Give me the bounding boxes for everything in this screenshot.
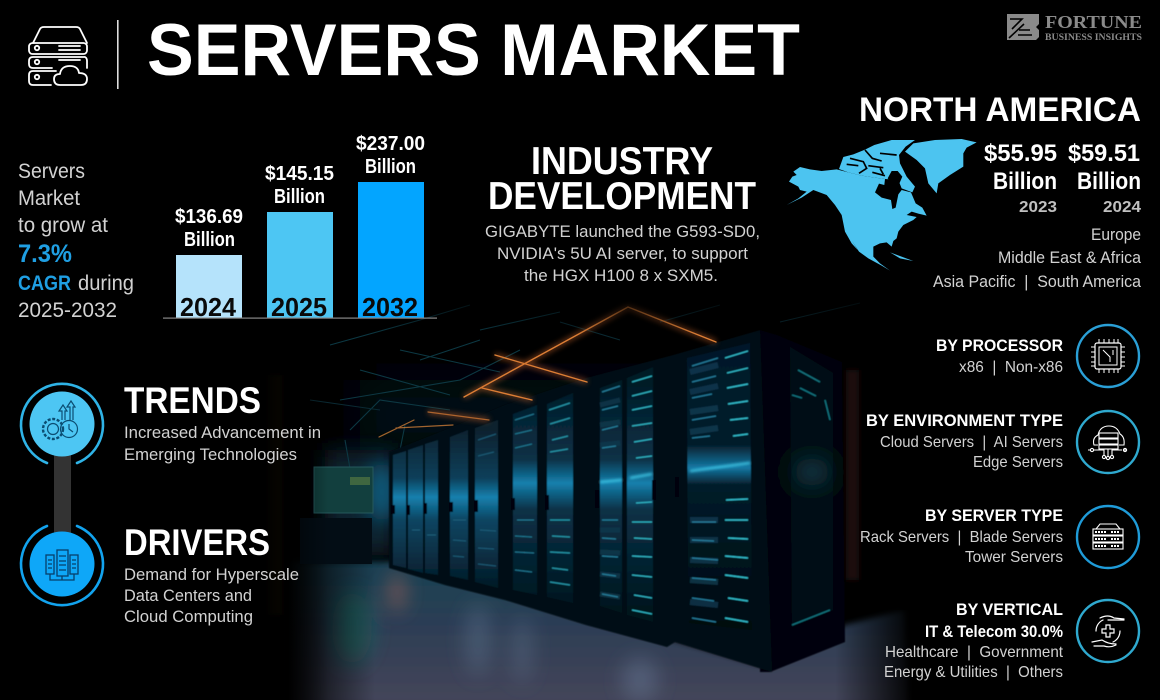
- icon: drivers circle: [21, 526, 103, 605]
- icon: processor chip: [1077, 325, 1139, 387]
- industry development text: NVIDIA's 5U AI server, to support: [497, 244, 748, 263]
- north america values: Billion: [993, 168, 1057, 195]
- industry development text: the HGX H100 8 x SXM5.: [524, 266, 718, 285]
- drivers text: Cloud Computing: [124, 608, 253, 626]
- north america values: $59.51: [1068, 140, 1140, 167]
- connector: [54, 455, 71, 535]
- segment: by processor: x86 | Non-x86: [959, 359, 1063, 376]
- room wall and ceiling tint: [360, 380, 780, 450]
- arctic archipelago: [839, 140, 915, 192]
- rack group: [389, 330, 845, 672]
- growth text block: to grow at: [18, 214, 108, 237]
- bar 2025: $145.15: [265, 163, 334, 185]
- side glass: [790, 347, 833, 627]
- bar 2032: [356, 133, 425, 322]
- dim orange columns: [846, 370, 859, 580]
- drivers text: Demand for Hyperscale: [124, 566, 299, 584]
- bar 2025: 2025: [271, 292, 327, 322]
- drivers text: [124, 522, 299, 626]
- segment: by processor: BY PROCESSOR: [936, 336, 1063, 355]
- segment: by server type: [860, 506, 1139, 568]
- archipelago channels: [847, 150, 897, 176]
- header divider: [117, 20, 119, 89]
- floor reflections: [332, 572, 658, 700]
- bar 2024: [175, 206, 243, 322]
- other regions: [933, 225, 1142, 291]
- title: SERVERS MARKET: [147, 10, 800, 91]
- industry development text: GIGABYTE launched the G593-SD0,: [485, 222, 760, 241]
- orange ceiling lights: [379, 307, 716, 437]
- logo: Fortune Business Insights: FORTUNE: [1045, 12, 1142, 32]
- bright glow streaks: [600, 463, 750, 482]
- segment: by processor: [936, 325, 1139, 387]
- segment: by server type: Rack Servers | Blade Servers: [860, 529, 1063, 546]
- side glass glow: [794, 458, 830, 486]
- server unit rows: [690, 365, 718, 605]
- north america values: $55.95: [984, 140, 1057, 167]
- segment: by environment type: Cloud Servers | AI Servers: [880, 434, 1063, 451]
- greenland: [905, 139, 977, 193]
- floor: [290, 562, 910, 700]
- icon: server stack: [1077, 506, 1139, 568]
- foxe basin: [888, 171, 902, 184]
- segment: by environment type: [866, 411, 1139, 473]
- header icon: server with cloud: [29, 27, 87, 85]
- rack side panel: [760, 330, 845, 672]
- north america heading: NORTH AMERICA: [859, 91, 1141, 129]
- bar 2032: Billion: [365, 156, 416, 178]
- segment: by vertical: Energy & Utilities | Others: [884, 664, 1063, 681]
- bar chart: [163, 133, 437, 322]
- growth text block: [18, 160, 134, 322]
- segment: by vertical: [884, 600, 1139, 681]
- icon: hands with medical cross: [1077, 600, 1139, 662]
- industry development heading: DEVELOPMENT: [488, 175, 756, 218]
- drivers text: Data Centers and: [124, 587, 252, 605]
- mainland: [787, 167, 927, 271]
- growth text block: 2025-2032: [18, 299, 117, 322]
- bar 2025: [265, 163, 334, 322]
- icon: cloud server: [1077, 411, 1139, 473]
- led strips: [725, 351, 748, 622]
- trends text: [124, 380, 321, 464]
- teal ceiling lines: [330, 305, 560, 480]
- segment: by vertical: Healthcare | Government: [885, 644, 1064, 661]
- north america values: [984, 140, 1141, 216]
- north america values: 2023: [1019, 199, 1057, 216]
- bar 2024: 2024: [180, 292, 237, 322]
- floor right fade: [835, 600, 915, 700]
- cuba: [890, 252, 913, 261]
- growth text block: during: [78, 272, 134, 295]
- icon: trends circle: [21, 384, 103, 463]
- bar 2024: Billion: [184, 229, 235, 251]
- trends text: TRENDS: [124, 380, 261, 421]
- north america values: 2024: [1103, 199, 1141, 216]
- segment: by vertical: IT & Telecom 30.0%: [925, 623, 1063, 641]
- segment: by environment type: BY ENVIRONMENT TYPE: [866, 411, 1063, 430]
- industry development heading: INDUSTRY: [531, 140, 713, 183]
- far doors: [393, 420, 498, 588]
- floor left fade: [285, 555, 375, 700]
- other regions: Middle East & Africa: [998, 248, 1142, 267]
- segment: by vertical: BY VERTICAL: [956, 600, 1063, 619]
- monitor: [314, 467, 373, 513]
- trends text: Increased Advancement in: [124, 424, 321, 442]
- desk: [300, 518, 372, 564]
- logo: Fortune Business Insights: BUSINESS INSIGHTS: [1045, 33, 1142, 43]
- segment: by server type: BY SERVER TYPE: [925, 506, 1063, 525]
- drivers text: DRIVERS: [124, 522, 270, 563]
- logo: Fortune Business Insights: [1007, 12, 1142, 43]
- bar 2032: 2032: [362, 292, 418, 322]
- bar 2024: $136.69: [175, 206, 243, 228]
- growth text block: CAGR: [18, 272, 71, 295]
- segment: by environment type: Edge Servers: [973, 454, 1063, 471]
- segment: by server type: Tower Servers: [965, 549, 1063, 566]
- trends text: Emerging Technologies: [124, 446, 297, 464]
- mid doors: [513, 367, 653, 622]
- photo edge fades: [258, 290, 328, 700]
- growth text block: Servers: [18, 160, 85, 183]
- rack bodies: [389, 330, 772, 672]
- near doors: [687, 343, 752, 630]
- growth text block: Market: [18, 187, 80, 210]
- other regions: Asia Pacific | South America: [933, 272, 1142, 291]
- industry development text: [485, 222, 760, 285]
- north america values: Billion: [1077, 168, 1141, 195]
- bar 2032: $237.00: [356, 133, 425, 155]
- growth text block: 7.3%: [18, 240, 72, 268]
- door handles: [393, 477, 677, 515]
- other regions: Europe: [1091, 225, 1141, 244]
- industry development heading: [488, 140, 756, 218]
- map: North America: [787, 139, 977, 271]
- bar 2025: Billion: [274, 186, 325, 208]
